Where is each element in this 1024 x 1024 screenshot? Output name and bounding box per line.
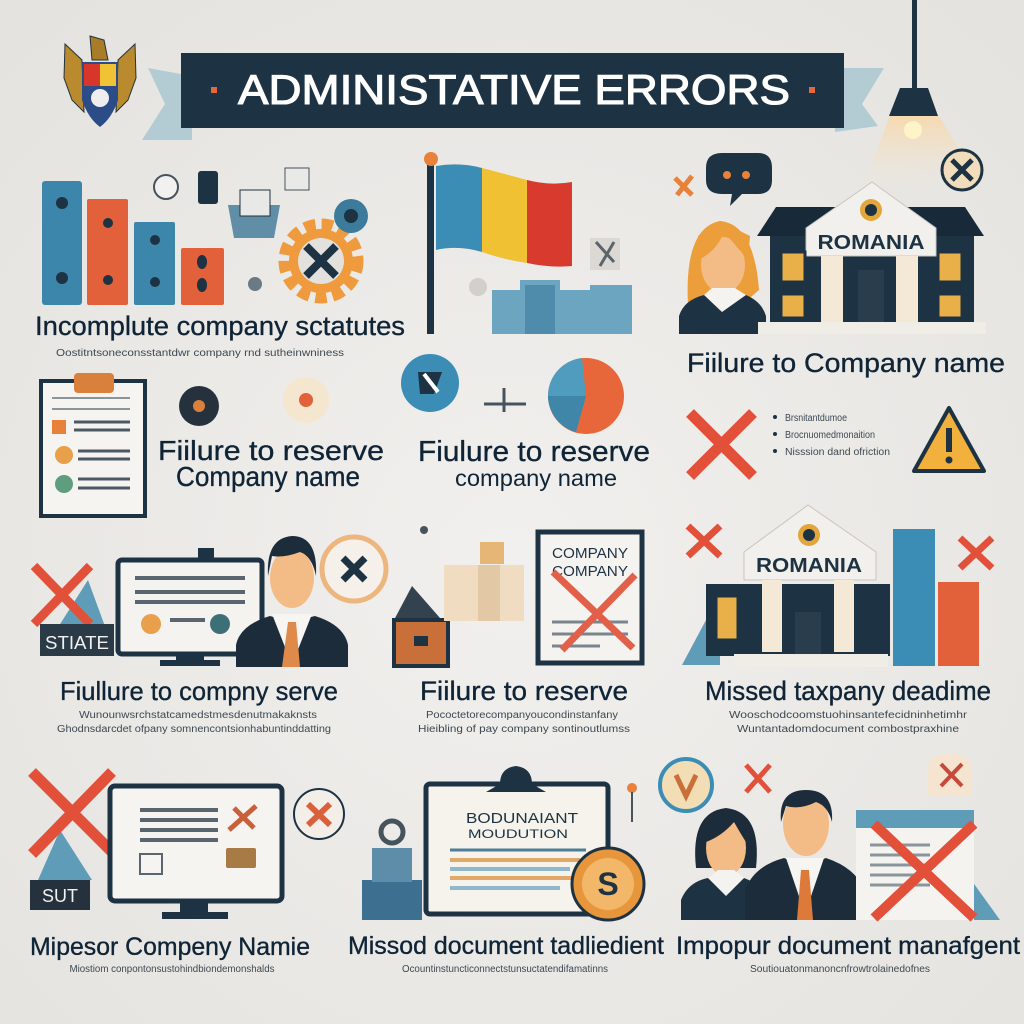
icon: romania building <box>757 182 986 334</box>
icon: dark badge <box>179 386 219 426</box>
icon: red cross <box>690 413 753 476</box>
heading: Mipesor Compeny Namie <box>30 933 310 961</box>
caption: Pococtetorecompanyoucondinstanfany <box>426 710 618 721</box>
icon: clip and pin <box>627 783 637 822</box>
caption: Ghodnsdarcdet ofpany somnencontsionhabuntinddatting <box>57 724 331 735</box>
caption: Miostiom conpontonsustohindbiondemonshalds <box>70 964 274 975</box>
heading: Fiullure to compny serve <box>60 676 338 706</box>
heading: Incomplute company sctatutes <box>35 311 405 341</box>
icon: man <box>745 790 864 920</box>
icon: document panel <box>426 766 608 914</box>
heading: Fiilure to reserve <box>158 435 384 466</box>
bar chart <box>893 529 979 666</box>
panel: failure to reserve company name, clipboard <box>41 373 384 516</box>
panel: improper company name <box>30 772 344 975</box>
icon: file box <box>362 821 422 920</box>
icon: flower badge <box>283 377 329 423</box>
icon: document with cross <box>856 810 1000 920</box>
icon: hanging lamp <box>862 0 985 190</box>
heading: Fiilure to reserve <box>420 676 628 706</box>
icon: document panel: MOUDUTION <box>468 827 568 841</box>
icon: circular blue badge <box>401 354 459 412</box>
icon: businessman <box>236 536 348 667</box>
icon: small cross <box>746 765 770 792</box>
panel: romanian flag <box>424 152 632 334</box>
icon: red cross with sign: SUT <box>42 886 78 906</box>
icon: woman <box>679 221 766 334</box>
icon: red cross with sign <box>30 772 114 910</box>
heading: Impopur document manafgent <box>676 932 1020 960</box>
icon: speech bubble <box>706 153 772 206</box>
panel: warning <box>690 408 984 476</box>
panel: failure to reserve, pie chart <box>401 354 650 491</box>
title banner <box>142 53 884 140</box>
panel: missed document deadline <box>348 766 664 975</box>
icon: coat of arms <box>64 36 136 127</box>
icon: document panel: BODUNAIANT <box>466 810 578 827</box>
title: ADMINISTATIVE ERRORS <box>238 66 790 113</box>
icon: small office objects <box>154 168 368 291</box>
icon: red cross with state sign <box>34 566 114 656</box>
caption: Wooschodcoomstuohinsantefecidninhetimhr <box>729 710 968 721</box>
icon: coin: S <box>597 866 619 902</box>
icon: crosses <box>688 526 992 568</box>
icon: clipboard <box>41 373 145 516</box>
icon: company document with cross: COMPANY <box>552 563 628 580</box>
heading: Company name <box>176 461 360 492</box>
panel: incomplete company statutes <box>35 168 405 359</box>
icon: red cross with state sign: STIATE <box>45 633 109 653</box>
icon: small cross <box>675 176 692 195</box>
icon: city silhouette <box>469 238 632 334</box>
pie chart <box>548 358 624 434</box>
icon: gear with cross <box>285 225 357 297</box>
subheading: company name <box>455 465 617 491</box>
list: Brsnitantdumoe <box>785 413 847 424</box>
panel: romania building with woman <box>675 150 1005 378</box>
list: Nisssion dand ofriction <box>785 447 890 458</box>
icon: cross badge <box>294 789 344 839</box>
heading: Missed taxpany deadime <box>705 676 991 706</box>
heading: Fiulure to reserve <box>418 436 650 468</box>
icon: romania building: ROMANIA <box>756 555 862 577</box>
list <box>773 413 890 458</box>
icon: company document with cross <box>538 532 642 663</box>
panel: missed tax deadline <box>682 505 992 735</box>
caption: Ocountinstuncticonnectstunsuctatendifamatinns <box>402 964 608 975</box>
panel: failure to company serve <box>34 536 386 735</box>
heading: Fiilure to Company name <box>687 348 1005 378</box>
icon: company document with cross: COMPANY <box>552 545 628 562</box>
icon: blurred boxes <box>420 526 524 621</box>
icon: cross badge <box>942 150 982 190</box>
caption: Oostitntsoneconsstantdwr company rnd sutheinwniness <box>56 348 344 359</box>
heading: Missod document tadliedient <box>348 932 664 960</box>
caption: Wuntantadomdocument combostpraxhine <box>737 724 960 735</box>
icon: binders <box>42 181 224 305</box>
caption: Wunounwsrchstatcamedstmesdenutmakaknsts <box>79 710 317 721</box>
caption: Hieibling of pay company sontinoutlumss <box>418 724 630 735</box>
panel: improper document management <box>660 754 1020 975</box>
list: Brocnuomedmonaition <box>785 430 875 441</box>
divider icon <box>484 388 526 412</box>
icon: monitor <box>118 548 262 666</box>
icon: desk box <box>394 586 448 666</box>
icon: cross badge <box>322 537 386 601</box>
icon: cross tag <box>928 754 972 796</box>
icon: coin <box>572 848 644 920</box>
panel: failure to reserve, company document <box>394 526 642 735</box>
icon: warning triangle <box>914 408 984 471</box>
icon: badge <box>660 759 712 811</box>
icon: romania building <box>682 505 890 667</box>
icon: monitor <box>110 786 282 919</box>
icon: woman <box>681 808 762 920</box>
caption: Soutiouatonmanoncnfrowtrolainedofnes <box>750 964 930 975</box>
building label: ROMANIA <box>818 232 924 254</box>
